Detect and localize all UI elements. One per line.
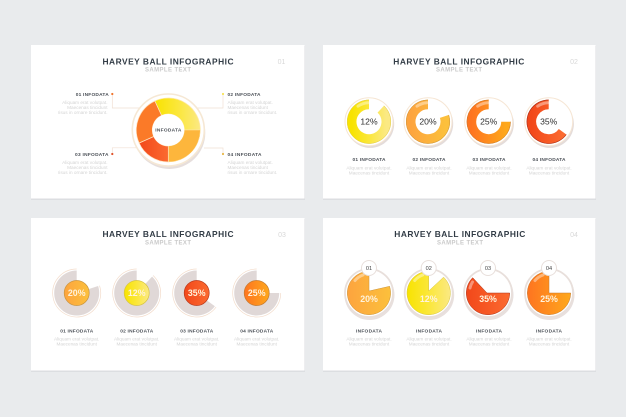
card 02 <box>323 45 596 198</box>
donut chart: INFODATA <box>155 128 182 134</box>
caption 04: INFODATA <box>536 328 563 334</box>
pie 20% <box>344 260 394 320</box>
ball 12%: 12% <box>360 117 378 127</box>
caption 01 <box>346 328 392 347</box>
caption 03: INFODATA <box>476 328 503 334</box>
caption 01: Aliquam erat volutpat. <box>346 336 392 342</box>
caption 01: 01 INFODATA <box>60 328 94 334</box>
panel 03: grey sectors <box>31 218 305 372</box>
caption 01: INFODATA <box>356 328 383 334</box>
label 04: 04 INFODATA <box>228 152 262 158</box>
ball 12%: 12% <box>128 288 146 298</box>
label 02: Maecenas tincidunt <box>228 105 269 110</box>
caption 02: 02 INFODATA <box>412 157 446 163</box>
card 03 shadow <box>31 219 305 372</box>
caption 03: 03 INFODATA <box>180 328 214 334</box>
card 04 shadow <box>323 219 596 372</box>
caption 03 <box>466 157 512 175</box>
caption 02: INFODATA <box>416 328 443 334</box>
caption 01: Maecenas tincidunt <box>57 342 98 347</box>
caption 02 <box>406 328 452 347</box>
card 01 <box>31 45 304 198</box>
pie 12%: 02 <box>426 266 432 272</box>
caption 02: Maecenas tincidunt <box>409 342 450 347</box>
label 03: risus in ornare tincidunt. <box>58 170 108 175</box>
subtitle 03: SAMPLE TEXT <box>145 240 191 246</box>
ball 25% <box>233 269 281 317</box>
caption 03: Maecenas tincidunt <box>177 342 218 347</box>
caption 02: Maecenas tincidunt <box>409 170 450 175</box>
caption 01: Maecenas tincidunt <box>349 342 390 347</box>
caption 03: Aliquam erat volutpat. <box>466 165 512 170</box>
caption 02: Aliquam erat volutpat. <box>406 165 452 170</box>
caption 01 <box>54 328 99 347</box>
caption 04: 04 INFODATA <box>240 328 274 334</box>
pie 35%: 03 <box>485 266 491 272</box>
label 02 <box>228 92 277 115</box>
caption 03: Maecenas tincidunt <box>469 170 510 175</box>
caption 01: Aliquam erat volutpat. <box>346 165 392 170</box>
caption 02: Aliquam erat volutpat. <box>406 336 452 342</box>
ball 25% <box>465 98 514 148</box>
number 03: 03 <box>278 232 286 239</box>
label 01 <box>58 92 109 115</box>
caption 04: Maecenas tincidunt <box>237 342 278 347</box>
caption 04: Aliquam erat volutpat. <box>526 336 572 342</box>
label 04: risus in ornare tincidunt. <box>228 170 277 175</box>
subtitle 04: SAMPLE TEXT <box>437 240 483 246</box>
pie 20%: 20% <box>360 294 378 304</box>
pie 20%: 01 <box>366 266 372 272</box>
pie 35%: 35% <box>479 294 497 304</box>
panel 04: pies with badges <box>323 218 596 372</box>
caption 02 <box>406 157 452 175</box>
ball 12% <box>345 98 394 148</box>
title 02: HARVEY BALL INFOGRAPHIC <box>393 56 524 66</box>
caption 02 <box>114 328 159 347</box>
label 04: Maecenas tincidunt <box>228 165 269 170</box>
label 04: Aliquam erat volutpat. <box>228 160 273 165</box>
caption 03: Maecenas tincidunt <box>469 342 510 347</box>
ball 35%: 35% <box>540 117 558 127</box>
ball 20%: 20% <box>419 117 437 127</box>
label 01: 01 INFODATA <box>76 92 109 98</box>
label 03 <box>58 152 109 175</box>
caption 01: Aliquam erat volutpat. <box>54 336 99 342</box>
pie 25%: 25% <box>540 294 558 304</box>
card 01 shadow <box>31 46 305 200</box>
ball 20% <box>53 269 101 317</box>
ball 35%: 35% <box>188 288 206 298</box>
pie 25%: 04 <box>546 266 552 272</box>
caption 03: Aliquam erat volutpat. <box>174 336 219 342</box>
panel 02: ring balls <box>323 45 596 200</box>
pie 25% <box>524 260 574 320</box>
caption 03: Aliquam erat volutpat. <box>466 336 512 342</box>
pie 12%: 12% <box>420 294 438 304</box>
label 04 <box>228 152 277 175</box>
caption 03: 03 INFODATA <box>472 157 506 163</box>
caption 04: Maecenas tincidunt <box>529 342 570 347</box>
label 02: risus in ornare tincidunt. <box>228 110 277 115</box>
caption 01: 01 INFODATA <box>352 157 386 163</box>
title 04: HARVEY BALL INFOGRAPHIC <box>394 229 525 239</box>
label 01: Maecenas tincidunt <box>67 105 108 110</box>
caption 01 <box>346 157 392 175</box>
label 03: Maecenas tincidunt <box>67 165 108 170</box>
card 04 <box>323 218 596 370</box>
number 04: 04 <box>570 232 578 239</box>
label 01: Aliquam erat volutpat. <box>62 100 108 105</box>
label 01: risus in ornare tincidunt. <box>58 110 108 115</box>
pie 35% <box>464 260 514 320</box>
caption 04: Aliquam erat volutpat. <box>526 165 572 170</box>
ball 12% <box>113 269 161 317</box>
caption 04 <box>234 328 279 347</box>
subtitle 02: SAMPLE TEXT <box>436 68 482 74</box>
donut chart <box>132 94 205 169</box>
ball 20%: 20% <box>68 288 86 298</box>
caption 02: Aliquam erat volutpat. <box>114 336 159 342</box>
number 01: 01 <box>278 59 285 66</box>
pie 12% <box>404 260 454 320</box>
panel 01: donut <box>31 45 305 200</box>
caption 03 <box>466 328 512 347</box>
caption 02: Maecenas tincidunt <box>117 342 158 347</box>
caption 04: Maecenas tincidunt <box>529 170 570 175</box>
card 02 shadow <box>323 46 596 200</box>
ball 20% <box>404 98 453 148</box>
caption 03 <box>174 328 219 347</box>
label 02: 02 INFODATA <box>228 92 261 98</box>
caption 02: 02 INFODATA <box>120 328 154 334</box>
label 03: 03 INFODATA <box>75 152 109 158</box>
caption 04: 04 INFODATA <box>532 157 566 163</box>
title 01: HARVEY BALL INFOGRAPHIC <box>102 56 234 66</box>
caption 04: Aliquam erat volutpat. <box>234 336 279 342</box>
ball 25%: 25% <box>480 117 498 127</box>
label 03: Aliquam erat volutpat. <box>62 160 108 165</box>
connector lines <box>111 93 224 155</box>
ball 35% <box>525 98 574 148</box>
caption 04 <box>526 328 572 347</box>
card 03 <box>31 218 304 370</box>
caption 04 <box>526 157 572 175</box>
title 03: HARVEY BALL INFOGRAPHIC <box>102 229 234 239</box>
subtitle 01: SAMPLE TEXT <box>145 68 191 74</box>
label 02: Aliquam erat volutpat. <box>228 100 273 105</box>
ball 35% <box>173 269 216 317</box>
caption 01: Maecenas tincidunt <box>349 170 390 175</box>
ball 25%: 25% <box>248 288 266 298</box>
number 02: 02 <box>570 59 578 66</box>
